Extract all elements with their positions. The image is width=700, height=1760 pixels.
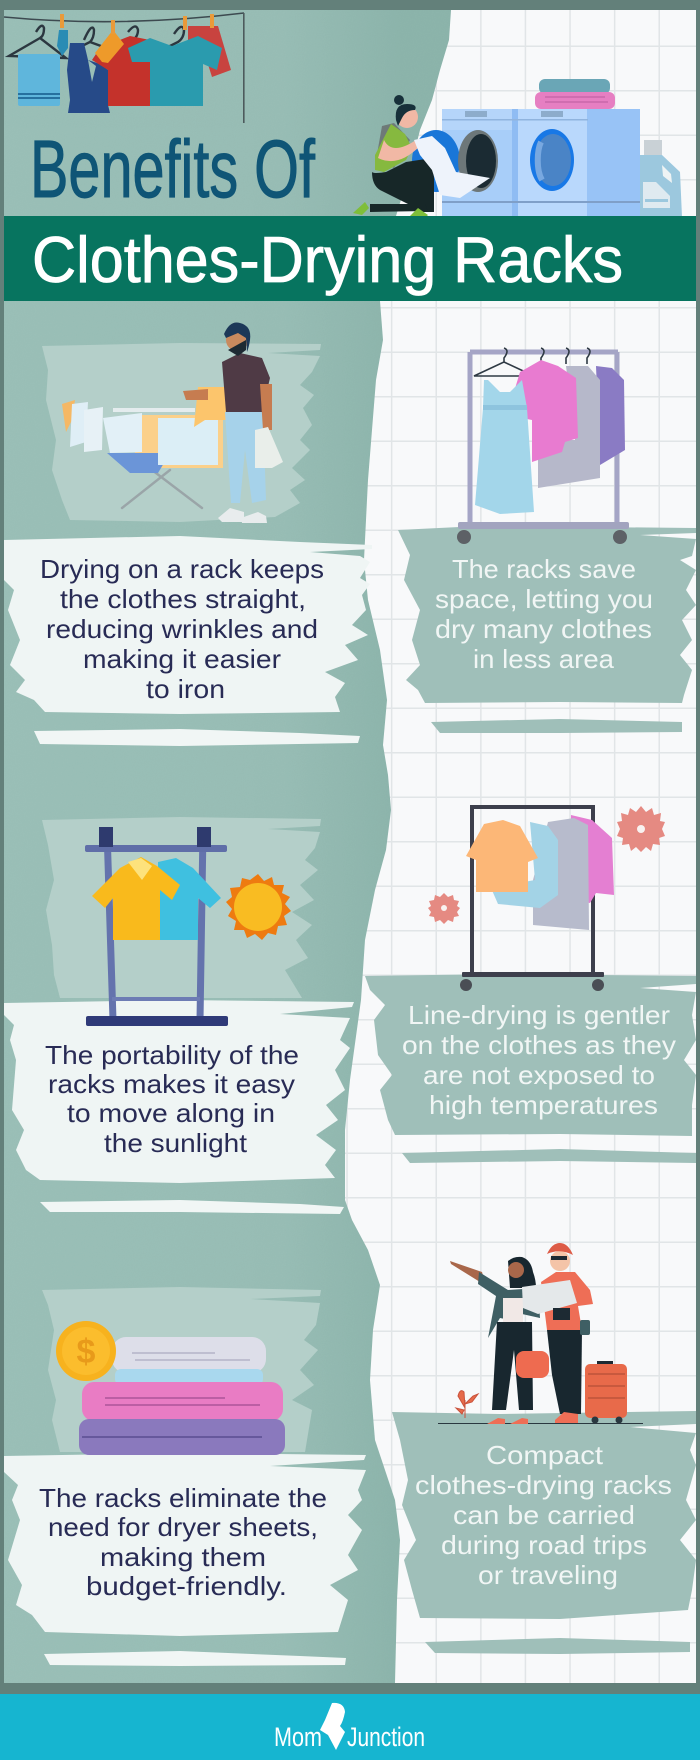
text: panel 2 left: the sunlight <box>104 1128 248 1158</box>
logo: MomJunction <box>274 1703 425 1752</box>
brush: panel 1 image backdrop <box>42 343 321 522</box>
icon: folded towels stack <box>79 1337 285 1455</box>
text: panel 1 left: reducing wrinkles and <box>46 614 318 644</box>
brush: panel 2 text backdrop <box>4 1000 354 1183</box>
brush: panel 1 text stripe <box>34 729 360 746</box>
washer door open <box>412 130 460 192</box>
dryer door <box>530 129 574 191</box>
tiled wall background top <box>4 10 696 216</box>
man <box>225 412 266 503</box>
ground line <box>438 1423 643 1424</box>
icon: small flower <box>428 893 460 924</box>
text: panel 3 left <box>39 1483 327 1601</box>
icon: man with drying rack <box>62 322 283 523</box>
glove <box>95 30 124 63</box>
red shirt <box>92 36 150 106</box>
text: panel 3 right: or traveling <box>478 1560 618 1590</box>
text: panel 3 left: making them <box>100 1542 266 1572</box>
yellow shirt <box>92 857 180 940</box>
text: panel 2 left: racks makes it easy <box>48 1069 295 1099</box>
logo: MomJunction: Mom <box>274 1722 322 1752</box>
brush: right panel 3 stripe <box>425 1638 690 1654</box>
text: panel 1 left: to iron <box>146 674 225 704</box>
brush: right panel 2 stripe <box>402 1149 696 1163</box>
text: panel 2 left: The portability of the <box>45 1040 299 1070</box>
blue sweater <box>491 822 558 908</box>
brush: right panel 2 text backdrop <box>365 974 696 1136</box>
brush: panel 2 image backdrop <box>42 817 321 998</box>
map <box>522 1280 577 1314</box>
icon: clothesline with hanging clothes <box>4 13 245 123</box>
text: panel 1 right: The racks save <box>452 554 636 584</box>
heading: Benefits Of: Benefits Of <box>30 124 315 215</box>
torn paper background <box>4 10 464 1683</box>
icon: black clothes rack <box>460 807 614 991</box>
text: panel 3 right: Compact <box>486 1440 604 1470</box>
red shorts <box>188 26 231 77</box>
text: panel 3 left: The racks eliminate the <box>39 1483 327 1513</box>
icon: folded towels on washer <box>535 79 615 109</box>
brush: panel 3 text stripe <box>44 1651 346 1666</box>
gray coat <box>533 818 589 930</box>
blue dress <box>475 380 534 514</box>
suitcase <box>597 1361 613 1365</box>
pink shirt <box>570 815 614 903</box>
gray coat <box>538 366 600 488</box>
brush: right panel 3 text backdrop <box>392 1411 696 1619</box>
text: panel 2 left <box>45 1040 299 1158</box>
text: panel 1 left: the clothes straight, <box>60 584 306 614</box>
text: panel 3 right: can be carried <box>453 1500 635 1530</box>
text: panel 3 right: clothes-drying racks <box>415 1470 672 1500</box>
camera <box>553 1308 570 1320</box>
text: panel 1 left <box>40 554 324 704</box>
tiled wall background lower <box>4 300 696 1683</box>
text: panel 1 right <box>435 554 653 674</box>
text: panel 1 right: space, letting you <box>435 584 653 614</box>
icon: clothes rack gray <box>457 348 629 544</box>
icon: dollar coin: $ <box>77 1333 96 1371</box>
text: panel 1 right: dry many clothes <box>435 614 652 644</box>
brush: panel 3 image backdrop <box>42 1287 321 1452</box>
icon: sun <box>226 874 291 940</box>
teal t-shirt <box>128 36 222 106</box>
duffel bag <box>516 1351 549 1378</box>
blue shirt <box>158 858 221 940</box>
text: panel 2 right <box>402 1000 676 1120</box>
heading: Clothes-Drying Racks: Clothes-Drying Racks <box>32 223 623 296</box>
pink shirt <box>507 360 578 462</box>
text: panel 1 right: in less area <box>473 644 615 674</box>
icon: dollar coin <box>56 1321 116 1381</box>
text: panel 2 right: high temperatures <box>429 1090 658 1120</box>
icon: detergent bottle <box>640 140 682 217</box>
text: panel 1 left: Drying on a rack keeps <box>40 554 324 584</box>
plant <box>456 1391 478 1418</box>
purple sweater <box>596 366 625 465</box>
icon: portable rack with shirts <box>85 827 228 1026</box>
jeans overall <box>67 43 110 113</box>
brush: panel 1 text backdrop <box>4 536 372 714</box>
icon: woman loading laundry <box>353 95 490 217</box>
text: panel 2 right: on the clothes as they <box>402 1030 676 1060</box>
blue sock <box>57 30 68 56</box>
icon: travelers with map and luggage <box>438 1243 643 1424</box>
brush: right panel 1 stripe <box>431 719 682 733</box>
heading banner <box>4 216 696 301</box>
text: panel 1 left: making it easier <box>83 644 281 674</box>
brush: panel 3 text backdrop <box>4 1453 366 1636</box>
icon: washing machines <box>412 109 640 217</box>
rack clothes <box>135 415 223 468</box>
text: panel 3 left: budget-friendly. <box>86 1571 287 1601</box>
text: panel 3 right <box>415 1440 672 1590</box>
pegs <box>60 14 214 34</box>
footer bar <box>0 1694 700 1760</box>
brush: panel 2 text stripe <box>40 1200 344 1214</box>
logo: MomJunction: Junction <box>347 1722 425 1752</box>
man <box>550 1251 570 1271</box>
text: panel 2 left: to move along in <box>67 1098 275 1128</box>
text: panel 2 right: Line-drying is gentler <box>408 1000 670 1030</box>
text: panel 3 left: need for dryer sheets, <box>48 1512 318 1542</box>
rack legs <box>122 470 202 508</box>
icon: large flower <box>617 806 665 852</box>
brush: right panel 1 text backdrop <box>398 526 696 703</box>
woman <box>508 1257 536 1288</box>
hanger <box>9 26 184 58</box>
text: panel 2 right: are not exposed to <box>423 1060 655 1090</box>
text: panel 3 right: during road trips <box>441 1530 647 1560</box>
towel <box>18 54 60 106</box>
orange shirt <box>466 820 538 892</box>
